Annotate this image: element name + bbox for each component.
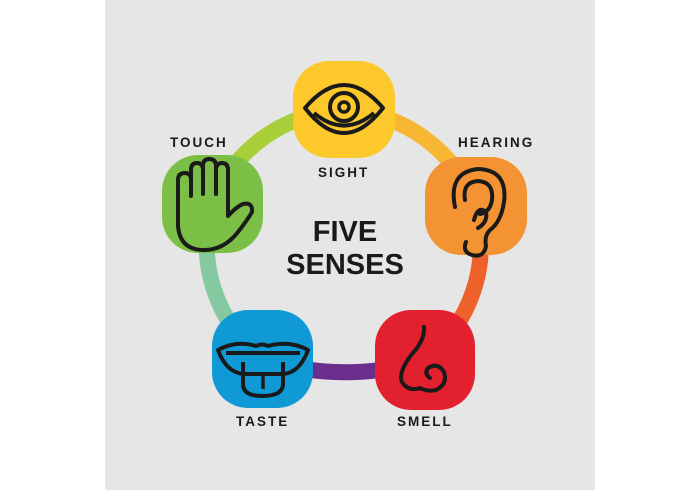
icon: ear	[454, 169, 504, 256]
icon: tongue and lips	[218, 344, 308, 396]
icon: hand	[178, 159, 252, 250]
ring: taste to touch	[207, 204, 262, 359]
title	[286, 216, 404, 281]
label: touch: TOUCH	[170, 135, 228, 150]
title: SENSES	[286, 249, 404, 281]
icon: nose	[401, 327, 445, 391]
panel: smell	[375, 310, 475, 410]
label: hearing: HEARING	[458, 135, 534, 150]
label: sight: SIGHT	[318, 165, 369, 180]
ring: hearing to smell	[425, 206, 481, 360]
panel: sight	[293, 61, 395, 158]
panel: touch	[162, 155, 263, 253]
icon: eye	[305, 85, 383, 133]
label: smell: SMELL	[397, 414, 453, 429]
title: FIVE	[313, 216, 377, 248]
label: taste: TASTE	[236, 414, 289, 429]
ring: touch to sight	[212, 110, 344, 204]
background panel	[105, 0, 595, 490]
ring: smell to taste	[262, 359, 425, 372]
ring: sight to hearing	[344, 110, 476, 206]
panel: taste	[212, 310, 313, 408]
panel: hearing	[425, 157, 527, 256]
